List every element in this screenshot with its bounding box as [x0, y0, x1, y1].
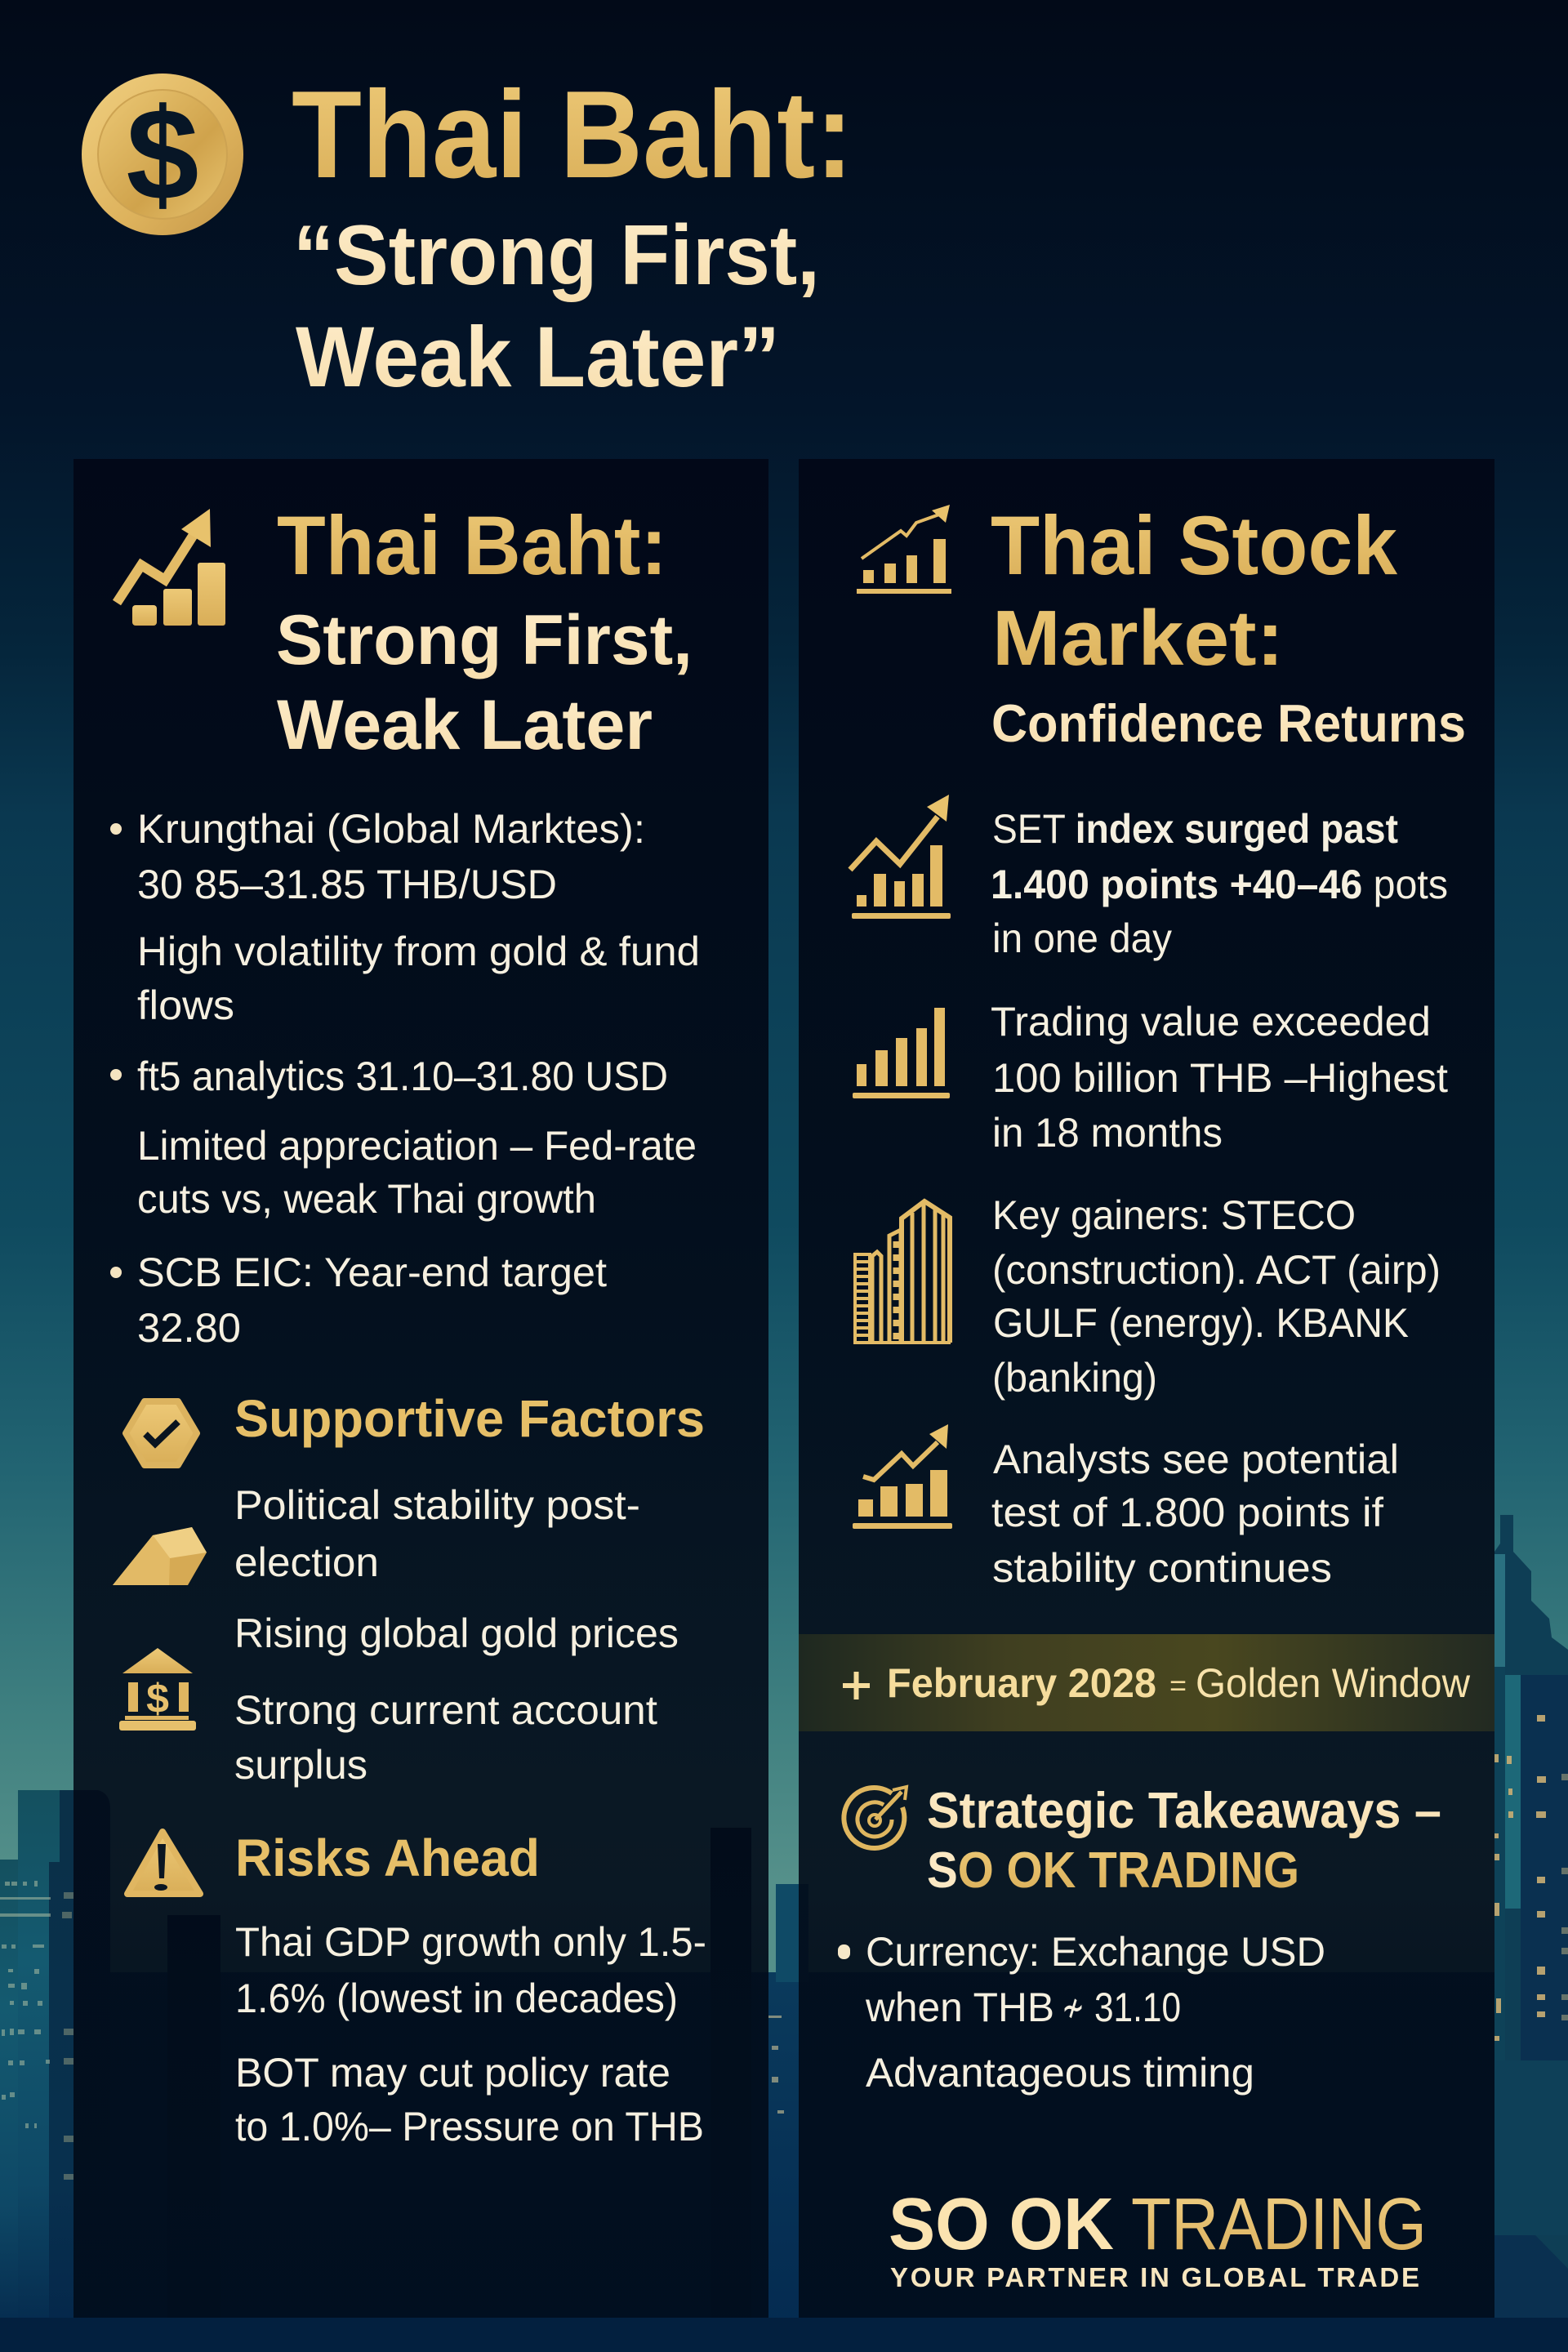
heading: Risks Ahead: Risks Ahead [235, 1829, 540, 1887]
text: trading value: in 18 months [992, 1110, 1223, 1156]
main title: “Strong First, [293, 208, 820, 303]
text: key gainers: (banking) [992, 1355, 1157, 1401]
text: SCB EIC target: SCB EIC: Year-end target [137, 1250, 607, 1295]
callout: Golden Window: Golden Window [1196, 1660, 1471, 1706]
callout: Golden Window: February 2028 [887, 1660, 1156, 1706]
text: GDP risk [235, 1919, 706, 2021]
text: political stability [234, 1482, 640, 1585]
text: trading value [991, 999, 1448, 1156]
coin icon [82, 74, 243, 235]
panel heading [276, 499, 693, 764]
text: currency takeaway: Advantageous timing [866, 2050, 1254, 2096]
text: SET index: in one day [992, 915, 1172, 961]
text: key gainers: GULF (energy). KBANK [993, 1300, 1409, 1346]
heading: Strategic Takeaways: SO OK TRADING [927, 1842, 1299, 1899]
heading: Supportive Factors: Supportive Factors [234, 1389, 705, 1448]
text: political stability: Political stability post- [234, 1482, 640, 1528]
logo: SO OK TRADING: TRADING [1131, 2184, 1427, 2265]
panel heading: Confidence Returns [991, 693, 1466, 753]
icon: warning triangle [127, 1832, 200, 1894]
text: BOT risk: BOT may cut policy rate [235, 2050, 670, 2096]
skyline: rear city block [0, 1972, 1568, 2352]
text: Krungthai forecast: Krungthai (Global Marktes): [137, 806, 645, 852]
text: gold prices: Rising global gold prices [234, 1610, 679, 1656]
text: current account: Strong current account [234, 1687, 657, 1733]
text: SET index: 1.400 points +40–46 pots [991, 862, 1448, 907]
callout: Golden Window [799, 1634, 1494, 1731]
text: ft5 analytics forecast: cuts vs, weak Thai growth [137, 1176, 596, 1222]
text: currency takeaway: Currency: Exchange USD [866, 1929, 1325, 1975]
panel: Thai Stock Market [799, 459, 1494, 2318]
text: GDP risk: Thai GDP growth only 1.5- [235, 1919, 706, 1965]
coin icon: $ [127, 81, 198, 227]
text: key gainers [992, 1192, 1441, 1401]
text: ft5 analytics forecast: ft5 analytics 31.10–31.80 USD [137, 1054, 668, 1099]
text: Krungthai forecast: flows [137, 982, 234, 1028]
text: current account [234, 1687, 657, 1788]
icon: bank [119, 1648, 196, 1731]
logo: SO OK TRADING: YOUR PARTNER IN GLOBAL TRADE [890, 2262, 1419, 2292]
text: GDP risk: 1.6% (lowest in decades) [235, 1976, 678, 2021]
heading: Strategic Takeaways: Strategic Takeaways – [927, 1783, 1441, 1839]
text: analysts: Analysts see potential [993, 1437, 1399, 1482]
text: ft5 analytics forecast: Limited appreciation – Fed-rate [137, 1123, 697, 1169]
text: analysts [991, 1437, 1399, 1591]
panel heading: Weak Later [277, 686, 653, 764]
text: SCB EIC target [110, 1250, 607, 1351]
text: BOT risk [235, 2050, 704, 2149]
text: currency takeaway: 31.10 [1094, 1984, 1181, 2030]
skyline: left buildings [0, 1790, 808, 2352]
text: key gainers: Key gainers: STECO [992, 1192, 1356, 1238]
skyline: right buildings [1494, 1515, 1568, 2352]
text: SET index: SET index surged past [992, 806, 1398, 852]
text: analysts: stability continues [992, 1545, 1332, 1591]
panel heading [991, 499, 1466, 753]
text: SET index [991, 806, 1448, 961]
icon: stock chart heading [857, 505, 951, 594]
icon: bank: $ [146, 1676, 169, 1722]
logo: SO OK TRADING [889, 2184, 1427, 2292]
text: Krungthai forecast: High volatility from gold & fund [137, 929, 700, 974]
icon: gold bar [113, 1527, 207, 1585]
text: Krungthai forecast: 30 85–31.85 THB/USD [137, 862, 557, 907]
heading: Strategic Takeaways [927, 1783, 1441, 1899]
logo: SO OK TRADING: SO OK [889, 2184, 1114, 2265]
text: trading value: 100 billion THB –Highest [992, 1055, 1448, 1101]
panel heading: Thai Baht: [277, 499, 667, 592]
main title: Weak Later” [296, 310, 780, 405]
icon: target [844, 1787, 906, 1848]
main title [292, 65, 853, 405]
bottom strip [0, 2318, 1568, 2352]
text: BOT risk: to 1.0%– Pressure on THB [235, 2104, 704, 2149]
panel heading: Market: [992, 595, 1284, 682]
text: current account: surplus [234, 1742, 368, 1788]
icon: rising bars and arrow [117, 509, 225, 626]
text: currency takeaway [838, 1929, 1325, 2096]
panel heading: Thai Stock [991, 499, 1397, 592]
text: Krungthai forecast [110, 806, 700, 1028]
icon: analyst chart [853, 1424, 952, 1529]
text: currency takeaway: when THB [865, 1984, 1054, 2030]
icon: trading value bars [853, 1008, 950, 1098]
icon: hexagon check [126, 1401, 197, 1465]
text: currency takeaway: ≁ [1062, 1984, 1085, 2030]
text: key gainers: (construction). ACT (airp) [992, 1247, 1441, 1293]
icon: SET index chart [850, 795, 951, 919]
panel heading: Strong First, [276, 601, 693, 679]
text: analysts: test of 1.800 points if [991, 1490, 1383, 1535]
text: trading value: Trading value exceeded [991, 999, 1431, 1045]
panel: Thai Baht [74, 459, 768, 2318]
text: SCB EIC target: 32.80 [137, 1305, 241, 1351]
main title: Thai Baht: [292, 65, 853, 204]
text: ft5 analytics forecast [110, 1054, 697, 1222]
callout: Golden Window: = [1169, 1668, 1187, 1702]
icon: buildings [854, 1201, 951, 1344]
text: political stability: election [234, 1539, 379, 1585]
